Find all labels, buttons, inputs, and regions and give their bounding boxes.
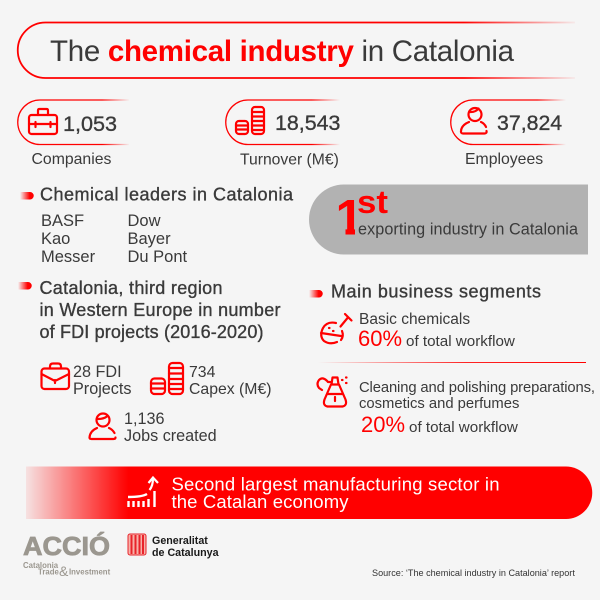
stat: employees bbox=[451, 100, 566, 168]
logo: ACCIÓ: Investment bbox=[69, 568, 111, 576]
text: company list bbox=[41, 212, 188, 266]
text: company list: Bayer bbox=[128, 230, 171, 248]
fdi: jobs bbox=[90, 410, 217, 445]
stat: companies: 1,053 bbox=[63, 111, 117, 136]
icon: growth chart bbox=[128, 478, 158, 507]
banner bbox=[26, 466, 592, 519]
segment: cleaning and cosmetics: cosmetics and perfumes bbox=[359, 396, 519, 412]
stat: employees: 37,824 bbox=[497, 111, 562, 135]
text: company list: BASF bbox=[41, 212, 84, 230]
heading: third region bbox=[18, 278, 280, 342]
title bbox=[18, 22, 575, 78]
fdi: jobs: Jobs created bbox=[124, 427, 217, 445]
icon: coins bbox=[151, 363, 183, 394]
segment: basic chemicals bbox=[321, 311, 515, 351]
stat: companies: Companies bbox=[32, 151, 112, 168]
fdi: jobs: 1,136 bbox=[124, 410, 165, 428]
heading: third region: of FDI projects (2016-2020) bbox=[40, 322, 264, 342]
icon: perfume spray bbox=[318, 378, 346, 406]
segment: basic chemicals: 60% bbox=[358, 326, 402, 351]
heading: main segments: Main business segments bbox=[331, 282, 541, 302]
icon: person bbox=[461, 108, 487, 134]
heading: third region: Catalonia, third region bbox=[40, 278, 222, 298]
stat: turnover: 18,543 bbox=[275, 111, 340, 135]
logo: Generalitat de Catalunya: Generalitat bbox=[152, 535, 208, 547]
text: company list: Kao bbox=[41, 230, 70, 248]
fdi: projects: Projects bbox=[73, 380, 131, 398]
divider bbox=[318, 362, 586, 364]
text: company list: Du Pont bbox=[128, 248, 188, 266]
logo: ACCIÓ: ACCIÓ bbox=[23, 531, 110, 561]
segment: cleaning and cosmetics: 20% bbox=[361, 412, 405, 437]
source note: Source: ‘The chemical industry in Catalonia’ report bbox=[372, 568, 575, 578]
stat: employees: Employees bbox=[465, 151, 543, 168]
fdi: projects: 28 FDI bbox=[73, 363, 122, 381]
fdi: capex bbox=[151, 363, 272, 398]
stat: turnover: Turnover (M€) bbox=[240, 152, 339, 168]
fdi: capex: 734 bbox=[189, 364, 216, 381]
segment: basic chemicals: of total workflow bbox=[406, 333, 515, 350]
panel: 1st exporting industry: exporting industry in Catalonia bbox=[358, 220, 578, 238]
panel: 1st exporting industry: st bbox=[357, 184, 388, 220]
fdi: capex: Capex (M€) bbox=[189, 381, 272, 398]
segment: cleaning and cosmetics: of total workflow bbox=[409, 419, 518, 436]
panel: 1st exporting industry bbox=[309, 184, 588, 254]
segment: cleaning and cosmetics bbox=[318, 378, 595, 437]
icon: briefcase bbox=[29, 109, 57, 134]
logo: Generalitat de Catalunya bbox=[128, 534, 220, 559]
title: The chemical industry in Catalonia bbox=[50, 35, 515, 68]
heading: third region: in Western Europe in number bbox=[40, 300, 280, 320]
text: company list: Messer bbox=[41, 248, 96, 266]
icon: briefcase bbox=[42, 364, 69, 389]
logo: ACCIÓ bbox=[23, 531, 111, 579]
icon: flask bbox=[321, 314, 352, 343]
fdi: projects bbox=[42, 363, 131, 398]
banner: the Catalan economy bbox=[172, 491, 349, 512]
logo: ACCIÓ: & bbox=[59, 563, 69, 579]
stat: turnover bbox=[226, 100, 340, 168]
icon: person bbox=[90, 414, 116, 439]
panel: 1st exporting industry: 1 bbox=[336, 190, 363, 246]
text: company list: Dow bbox=[128, 212, 161, 230]
icon: coins bbox=[236, 107, 264, 134]
logo: ACCIÓ: Catalonia bbox=[23, 561, 59, 570]
segment: basic chemicals: Basic chemicals bbox=[359, 311, 470, 328]
heading: chemical leaders: Chemical leaders in Catalonia bbox=[40, 184, 294, 204]
stat: companies bbox=[18, 100, 129, 168]
segment: cleaning and cosmetics: Cleaning and polishing preparations, bbox=[359, 380, 595, 396]
banner: Second largest manufacturing sector in bbox=[172, 474, 500, 494]
logo: Generalitat de Catalunya: de Catalunya bbox=[152, 547, 220, 559]
logo: ACCIÓ: Trade bbox=[38, 568, 59, 576]
